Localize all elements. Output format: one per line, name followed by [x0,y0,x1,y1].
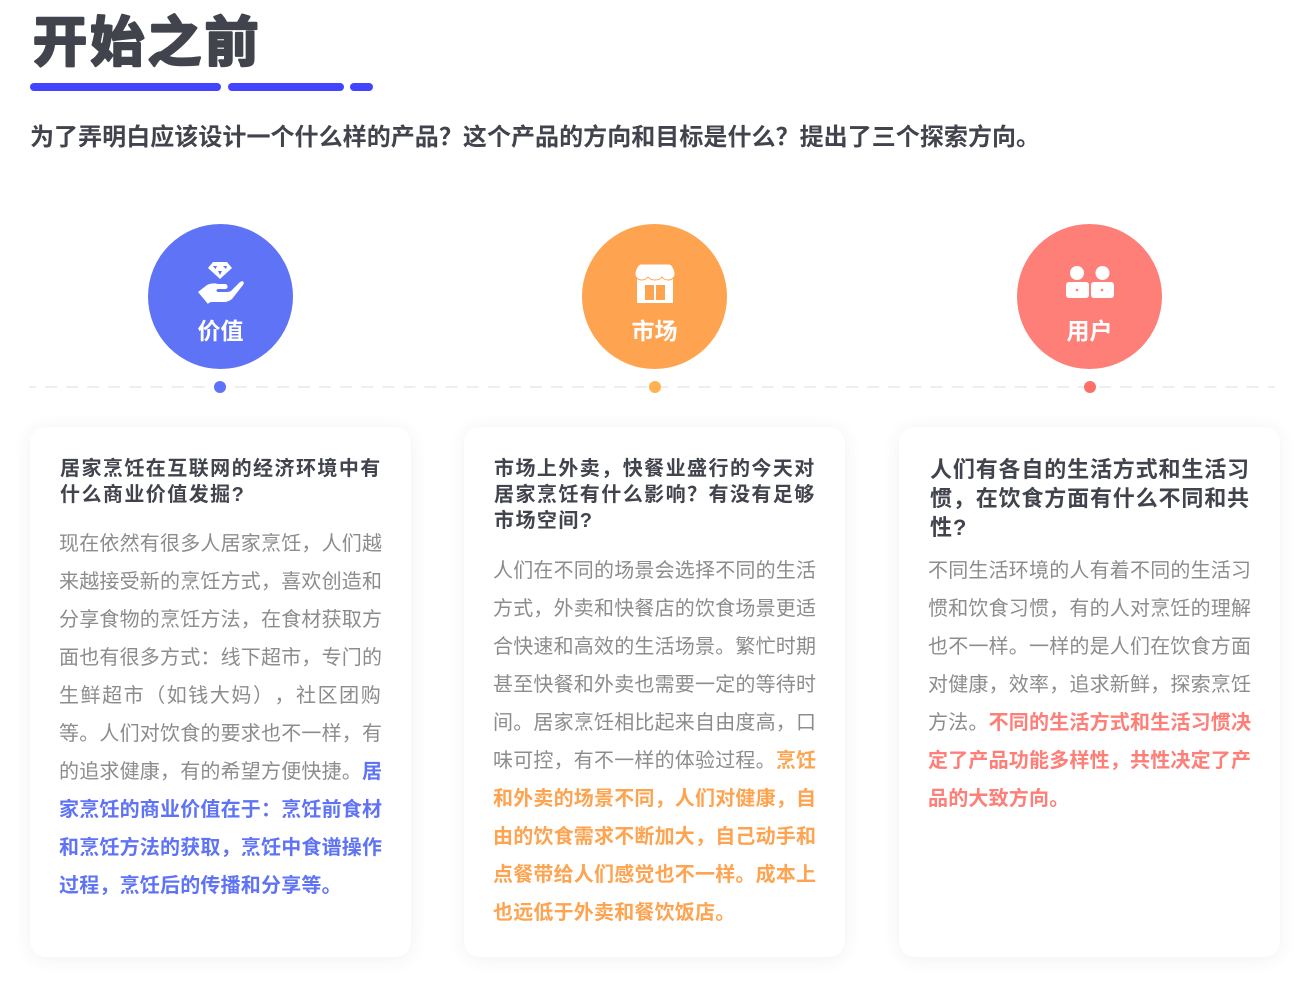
panel body: value: 面也有很多方式：线下超市，专门的 [59,647,382,669]
panel body: market: 由的饮食需求不断加大，自己动手和 [493,826,816,848]
panel: market [464,427,845,957]
dashed timeline [29,386,1275,388]
panel: value [30,427,411,957]
panel heading: users: 性? [930,515,967,540]
panel heading: value [60,458,382,506]
panel body: market: 点餐带给人们感觉也不一样。成本上 [493,864,816,886]
panel heading: value: 什么商业价值发掘? [60,484,245,506]
panel body: users: 方法。不同的生活方式和生活习惯决 [928,712,1251,734]
dot: market [649,381,661,393]
panel body: market: 方式，外卖和快餐店的饮食场景更适 [493,598,816,620]
panel body: value: 生鲜超市（如钱大妈），社区团购 [59,685,382,707]
panel body: market: 合快速和高效的生活场景。繁忙时期 [493,636,816,658]
panel body: users: 对健康，效率，追求新鲜，探索烹饪 [928,674,1251,696]
panel body: market: 甚至快餐和外卖也需要一定的等待时 [493,674,816,696]
panel body: market: 也远低于外卖和餐饮饭店。 [493,902,735,924]
panel body: market: 味可控，有不一样的体验过程。烹饪 [493,750,816,772]
dot: users [1084,381,1096,393]
panel heading: market [494,458,816,532]
panel heading: users [930,457,1250,540]
panel body: value: 的追求健康，有的希望方便快捷。居 [59,761,382,783]
panel body: value: 过程，烹饪后的传播和分享等。 [59,875,342,897]
label: users: 用户 [1066,318,1112,344]
panel body: market: 人们在不同的场景会选择不同的生活 [493,560,816,582]
panel heading: value: 居家烹饪在互联网的经济环境中有 [60,458,382,480]
panel body: market [493,560,816,924]
panel body: value: 家烹饪的商业价值在于：烹饪前食材 [59,799,382,821]
panel body: users: 也不一样。一样的是人们在饮食方面 [928,636,1251,658]
panel body: value: 和烹饪方法的获取，烹饪中食谱操作 [59,837,382,859]
panel heading: market: 市场空间? [494,510,593,532]
panel heading: users: 惯，在饮食方面有什么不同和共 [930,486,1250,511]
panel body: market: 间。居家烹饪相比起来自由度高，口 [493,712,816,734]
icon: storefront [636,264,674,303]
panel: users [899,427,1280,957]
panel body: users: 不同生活环境的人有着不同的生活习 [928,560,1251,582]
circle: users [1017,224,1162,369]
label: value: 价值 [198,318,244,344]
panel body: value: 现在依然有很多人居家烹饪，人们越 [59,533,382,555]
icon: two people [1066,266,1114,298]
panel body: users: 惯和饮食习惯，有的人对烹饪的理解 [928,598,1251,620]
title: 开始之前 [33,13,262,73]
panel heading: market: 居家烹饪有什么影响？有没有足够 [494,484,816,506]
panel body: value [59,532,382,897]
panel body: users: 品的大致方向。 [928,788,1069,810]
dot: value [214,381,226,393]
label: market: 市场 [632,318,678,344]
panel body: value: 分享食物的烹饪方法，在食材获取方 [59,609,382,631]
icon: diamond in hand [198,262,244,304]
panel body: market: 和外卖的场景不同，人们对健康，自 [493,788,816,810]
panel heading: users: 人们有各自的生活方式和生活习 [930,457,1250,482]
panel heading: market: 市场上外卖，快餐业盛行的今天对 [494,458,816,480]
subtitle: 为了弄明白应该设计一个什么样的产品？这个产品的方向和目标是什么？提出了三个探索方向。 [30,124,1040,151]
circle: market [582,224,727,369]
circle: value [148,224,293,369]
title underline [30,83,373,91]
panel body: users: 定了产品功能多样性，共性决定了产 [928,750,1251,772]
panel body: users [928,560,1251,810]
panel body: value: 来越接受新的烹饪方式，喜欢创造和 [59,571,382,593]
panel body: value: 等。人们对饮食的要求也不一样，有 [59,723,382,745]
